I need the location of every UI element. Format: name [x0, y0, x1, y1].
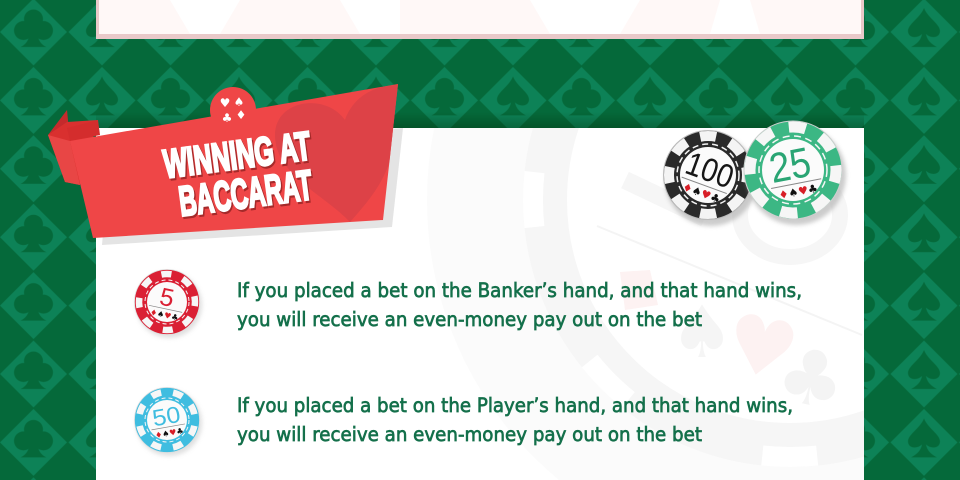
text: banker payout: you will receive an even-money pay out on the bet [237, 308, 702, 331]
banner suits: ♣ [222, 111, 232, 125]
heading: WINNING AT [161, 124, 313, 187]
banner suits: ♥ [220, 96, 230, 110]
chip: 50 blue: 50 [150, 401, 182, 431]
watermark: large poker chip [524, 128, 864, 466]
chip: 100 black: 100 [681, 144, 739, 195]
chip: 25 green: ♦♠♥♣ [778, 182, 819, 202]
chip: 100 black: ♦♠♥♣ [681, 180, 722, 206]
chip: 50 blue: ♦♠♥♣ [154, 426, 184, 440]
banner suits: ♠ [234, 95, 244, 109]
text: player bet: If you placed a bet on the Player’s hand, and that hand wins, [237, 394, 793, 417]
panel: winning at baccarat [96, 128, 864, 480]
chip: 5 red [134, 269, 202, 338]
banner suits: ♦ [236, 108, 246, 122]
heading: WINNING AT [162, 126, 315, 189]
banner shadow [102, 128, 403, 245]
watermark: large poker chip: ♠ [670, 290, 734, 374]
chip: 25 green: 25 [765, 138, 815, 192]
banner: circle tab [210, 87, 256, 133]
watermark: large poker chip: ♥ [717, 295, 806, 400]
chip: 100 black [662, 129, 757, 226]
chip: 25 green [744, 121, 846, 225]
banner ribbon [70, 84, 400, 238]
banner: fold [48, 110, 100, 185]
heading: BACCARAT [178, 163, 317, 227]
text: banker bet: If you placed a bet on the Banker’s hand, and that hand wins, [237, 279, 802, 302]
top panel [96, 0, 864, 39]
banner suits [220, 95, 246, 125]
heading [161, 124, 317, 227]
chip: 5 red: ♦♠♥♣ [149, 308, 179, 323]
chip: 50 blue [134, 387, 202, 456]
watermark: large poker chip: ♣ [769, 328, 854, 429]
heading: BACCARAT [176, 161, 315, 225]
chip: 5 red: 5 [157, 283, 177, 313]
text: player payout: you will receive an even-money pay out on the bet [237, 423, 702, 446]
